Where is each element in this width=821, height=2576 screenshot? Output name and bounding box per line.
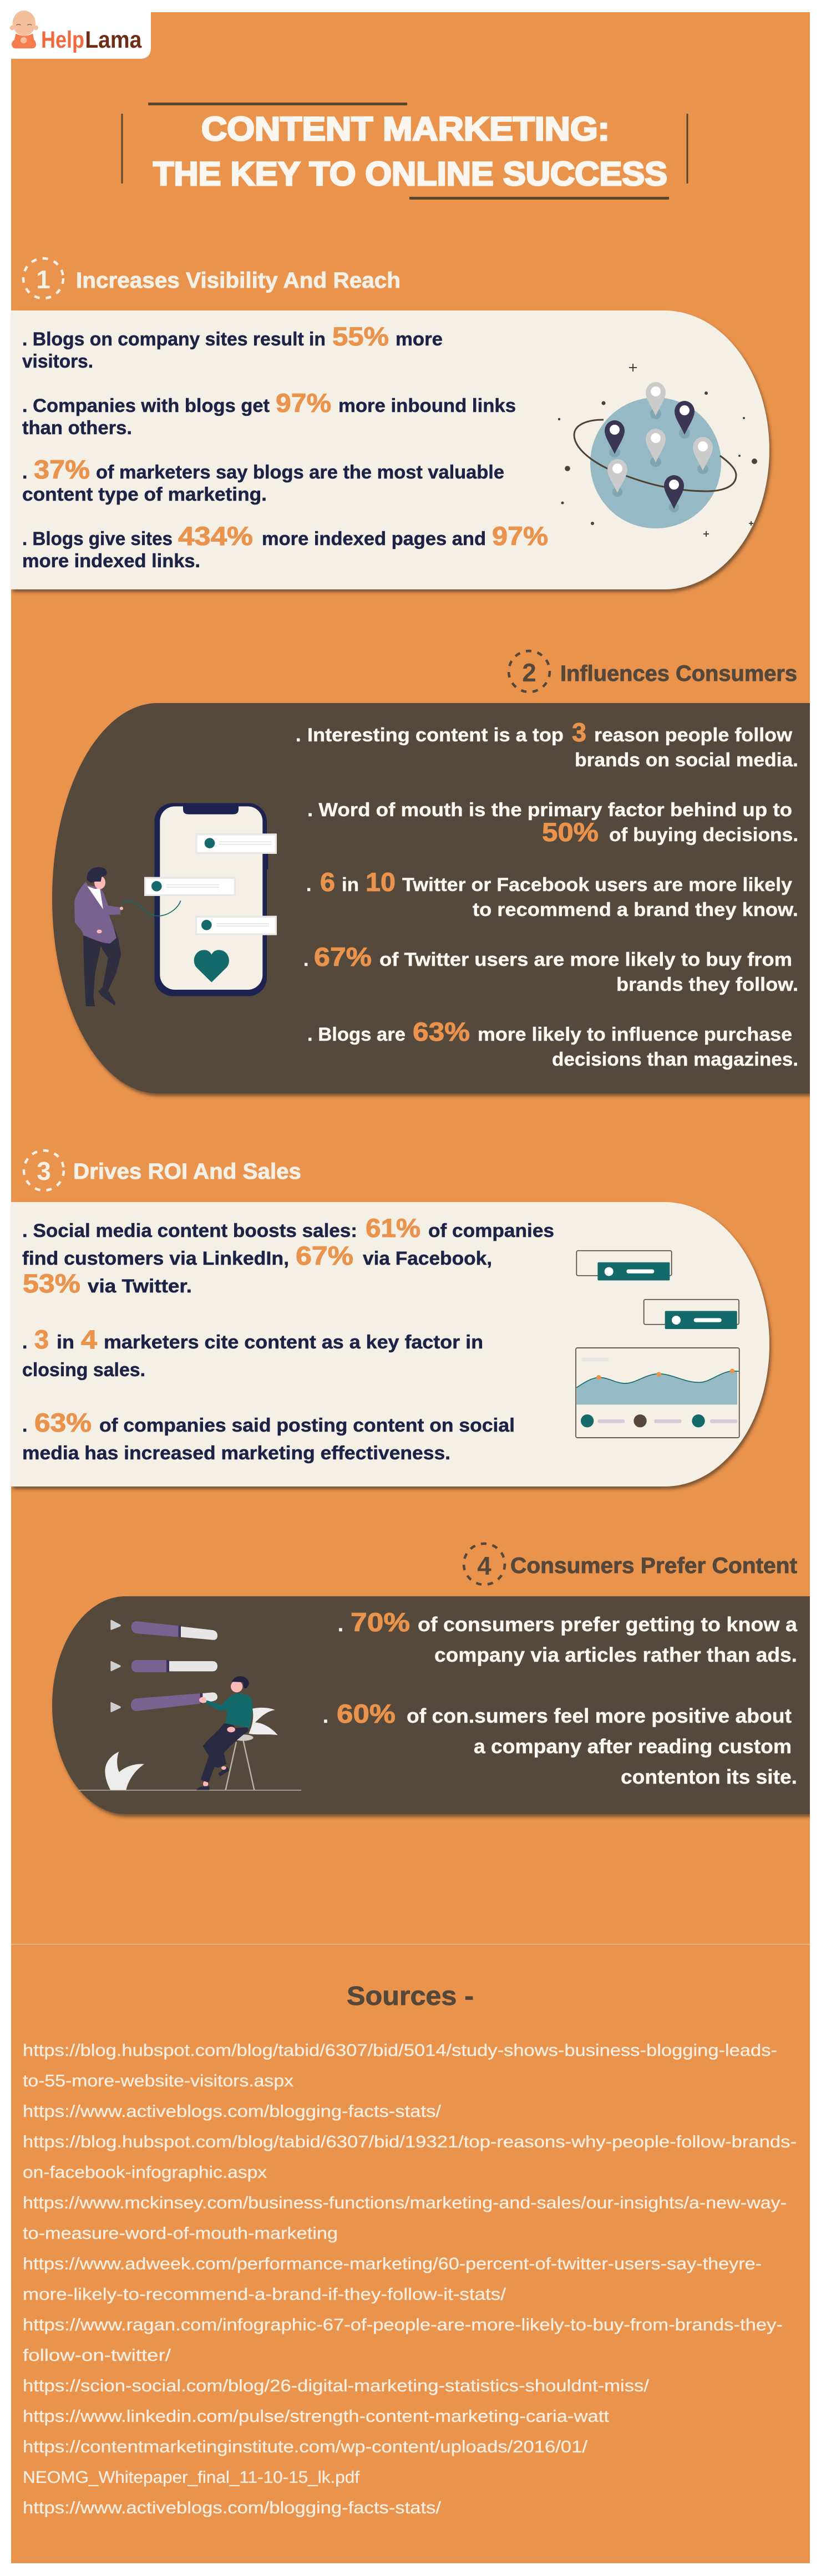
- heading: section 2: 2: [522, 658, 536, 687]
- heading: section 2: Influences Consumers: [560, 661, 797, 686]
- text: consumer preference stats: of consumers prefer getting to know a: [418, 1613, 798, 1636]
- text: visibility stats: . Blogs on company sites result in: [22, 329, 326, 350]
- text: visibility stats: 97%: [276, 388, 331, 418]
- text: consumer preference stats: .: [323, 1704, 328, 1727]
- text: source links: https://contentmarketinginstitute.com/wp-content/uploads/2016/01/: [23, 2437, 587, 2456]
- title block: [121, 103, 688, 200]
- text: consumer influence stats: . Word of mouth is the primary factor behind up to: [307, 800, 792, 821]
- text: source links: NEOMG_Whitepaper_final_11-10-15_lk.pdf: [23, 2467, 359, 2487]
- text: consumer influence stats: to recommend a brand they know.: [473, 899, 798, 920]
- text: ROI stats: [22, 1213, 554, 1464]
- chat cards: [145, 834, 276, 934]
- heading: section 2: [509, 651, 797, 692]
- heading: section 1: [23, 258, 401, 298]
- heading: section 3: [24, 1150, 301, 1190]
- text: ROI stats: 4: [81, 1325, 97, 1354]
- text: source links: https://www.mckinsey.com/business-functions/marketing-and-sales/our-insights/a-new-way-: [23, 2193, 787, 2212]
- illustration: person adjusting sliders: [79, 1620, 301, 1790]
- text: consumer influence stats: . Blogs are: [307, 1024, 406, 1045]
- illustration: dashboard chart: [576, 1251, 739, 1438]
- text: ROI stats: closing sales.: [22, 1360, 145, 1381]
- text: visibility stats: more: [396, 329, 443, 350]
- text: ROI stats: find customers via LinkedIn,: [22, 1248, 289, 1269]
- text: consumer influence stats: more likely to influence purchase: [478, 1024, 792, 1045]
- text: source links: https://www.linkedin.com/pulse/strength-content-marketing-caria-watt: [23, 2406, 609, 2426]
- text: visibility stats: [22, 322, 548, 572]
- text: consumer influence stats: reason people follow: [594, 725, 793, 746]
- text: visibility stats: visitors.: [22, 351, 93, 372]
- sliders: [110, 1620, 217, 1712]
- text: source links: [23, 2040, 797, 2517]
- heading: section 1: 1: [36, 265, 50, 294]
- text: source links: https://www.ragan.com/infographic-67-of-people-are-more-likely-to-buy-from-brands-they-: [23, 2315, 783, 2334]
- heading: section 3: 3: [37, 1157, 51, 1185]
- logo: HelpLama: Lama: [85, 27, 142, 53]
- panel: influences consumers: [52, 703, 815, 1093]
- text: source links: https://www.activeblogs.com/blogging-facts-stats/: [23, 2101, 441, 2121]
- panel: increases visibility and reach: [11, 310, 769, 589]
- text: consumer influence stats: .: [296, 725, 301, 746]
- text: consumer influence stats: brands on social media.: [575, 750, 798, 771]
- text: ROI stats: .: [22, 1332, 27, 1353]
- text: source links: https://blog.hubspot.com/blog/tabid/6307/bid/5014/study-shows-business-blogging-leads-: [23, 2040, 777, 2060]
- text: consumer influence stats: of Twitter users are more likely to buy from: [379, 949, 792, 970]
- text: ROI stats: via Twitter.: [88, 1276, 192, 1297]
- text: visibility stats: of marketers say blogs are the most valuable: [96, 462, 504, 483]
- text: consumer preference stats: of con.sumers feel more positive about: [407, 1704, 792, 1727]
- text: consumer influence stats: 50%: [542, 817, 599, 847]
- heading: section 3: Drives ROI And Sales: [73, 1159, 301, 1184]
- text: source links: https://scion-social.com/blog/26-digital-marketing-statistics-shouldnt-miss/: [23, 2376, 649, 2395]
- illustration: man with phone: [74, 803, 276, 1006]
- text: visibility stats: more inbound links: [338, 395, 516, 416]
- text: source links: https://www.adweek.com/performance-marketing/60-percent-of-twitter-users-say-theyre-: [23, 2254, 762, 2273]
- text: consumer influence stats: [296, 717, 798, 1070]
- panel: drives ROI and sales: [11, 1202, 769, 1486]
- text: visibility stats: 97%: [492, 521, 548, 551]
- person on stool: [196, 1676, 254, 1790]
- text: ROI stats: marketers cite content as a key factor in: [104, 1332, 483, 1353]
- text: consumer influence stats: of buying decisions.: [609, 824, 798, 846]
- text: visibility stats: . Companies with blogs get: [22, 395, 270, 416]
- text: visibility stats: more indexed links.: [22, 551, 200, 572]
- text: consumer influence stats: 6: [320, 867, 335, 897]
- text: source links: to-55-more-website-visitors.aspx: [23, 2071, 294, 2090]
- text: visibility stats: . Blogs give sites: [22, 528, 173, 549]
- logo: HelpLama: Help: [41, 27, 84, 53]
- text: source links: on-facebook-infographic.aspx: [23, 2162, 267, 2182]
- text: ROI stats: of companies: [428, 1220, 554, 1241]
- text: source links: more-likely-to-recommend-a-brand-if-they-follow-it-stats/: [23, 2284, 506, 2304]
- text: consumer preference stats: company via articles rather than ads.: [434, 1643, 797, 1666]
- text: source links: to-measure-word-of-mouth-marketing: [23, 2223, 338, 2243]
- phone: [154, 803, 268, 996]
- heading: section 4: [464, 1544, 797, 1585]
- text: visibility stats: than others.: [22, 418, 132, 439]
- icon: globe with map pins: [558, 364, 757, 537]
- text: ROI stats: media has increased marketing effectiveness.: [22, 1443, 450, 1464]
- heading: section 1: Increases Visibility And Reach: [76, 268, 401, 293]
- text: visibility stats: .: [22, 462, 27, 483]
- text: consumer preference stats: contenton its site.: [621, 1765, 797, 1788]
- text: consumer influence stats: .: [306, 874, 311, 895]
- text: consumer influence stats: in: [342, 874, 359, 895]
- text: visibility stats: 37%: [34, 455, 90, 484]
- text: visibility stats: more indexed pages and: [262, 528, 486, 549]
- logo: HelpLama: [0, 0, 151, 59]
- text: consumer influence stats: Interesting content is a top: [307, 725, 564, 746]
- text: ROI stats: 67%: [296, 1241, 353, 1270]
- text: consumer preference stats: a company after reading custom: [474, 1735, 792, 1758]
- text: ROI stats: in: [57, 1332, 74, 1353]
- heading: sources: Sources -: [347, 1982, 474, 2011]
- text: visibility stats: 434%: [178, 521, 253, 551]
- heading: section 4: Consumers Prefer Content: [510, 1554, 797, 1578]
- text: source links: https://blog.hubspot.com/blog/tabid/6307/bid/19321/top-reasons-why-people-follow-brands-: [23, 2132, 797, 2151]
- title block: THE KEY TO ONLINE SUCCESS: [153, 155, 667, 192]
- title block: CONTENT MARKETING:: [201, 110, 610, 147]
- text: ROI stats: via Facebook,: [363, 1248, 492, 1269]
- text: consumer preference stats: 60%: [337, 1699, 396, 1728]
- text: consumer preference stats: [323, 1607, 798, 1788]
- text: consumer influence stats: .: [303, 949, 308, 970]
- text: source links: https://www.activeblogs.com/blogging-facts-stats/: [23, 2498, 441, 2517]
- text: consumer preference stats: 70%: [351, 1607, 410, 1637]
- text: consumer influence stats: Twitter or Facebook users are more likely: [402, 874, 792, 895]
- text: consumer influence stats: 10: [366, 867, 396, 897]
- text: ROI stats: . Social media content boosts sales:: [22, 1220, 357, 1241]
- plants: [105, 1708, 278, 1790]
- text: consumer influence stats: 67%: [314, 942, 372, 971]
- text: consumer influence stats: brands they follow.: [616, 974, 798, 995]
- text: visibility stats: 55%: [332, 322, 389, 351]
- text: consumer influence stats: 63%: [413, 1017, 470, 1046]
- text: ROI stats: 63%: [34, 1408, 92, 1437]
- text: ROI stats: 61%: [366, 1213, 420, 1243]
- text: consumer influence stats: decisions than magazines.: [552, 1049, 798, 1070]
- panel: consumers prefer content: [52, 1596, 815, 1814]
- text: ROI stats: 3: [34, 1325, 49, 1354]
- text: consumer influence stats: 3: [572, 717, 586, 747]
- text: consumer preference stats: .: [338, 1613, 343, 1636]
- text: ROI stats: .: [22, 1415, 27, 1436]
- text: ROI stats: of companies said posting content on social: [99, 1415, 515, 1436]
- text: visibility stats: content type of marketing.: [22, 484, 267, 505]
- text: source links: follow-on-twitter/: [23, 2345, 171, 2365]
- man: [74, 867, 123, 1006]
- heading: section 4: 4: [477, 1551, 491, 1580]
- text: ROI stats: 53%: [23, 1269, 80, 1298]
